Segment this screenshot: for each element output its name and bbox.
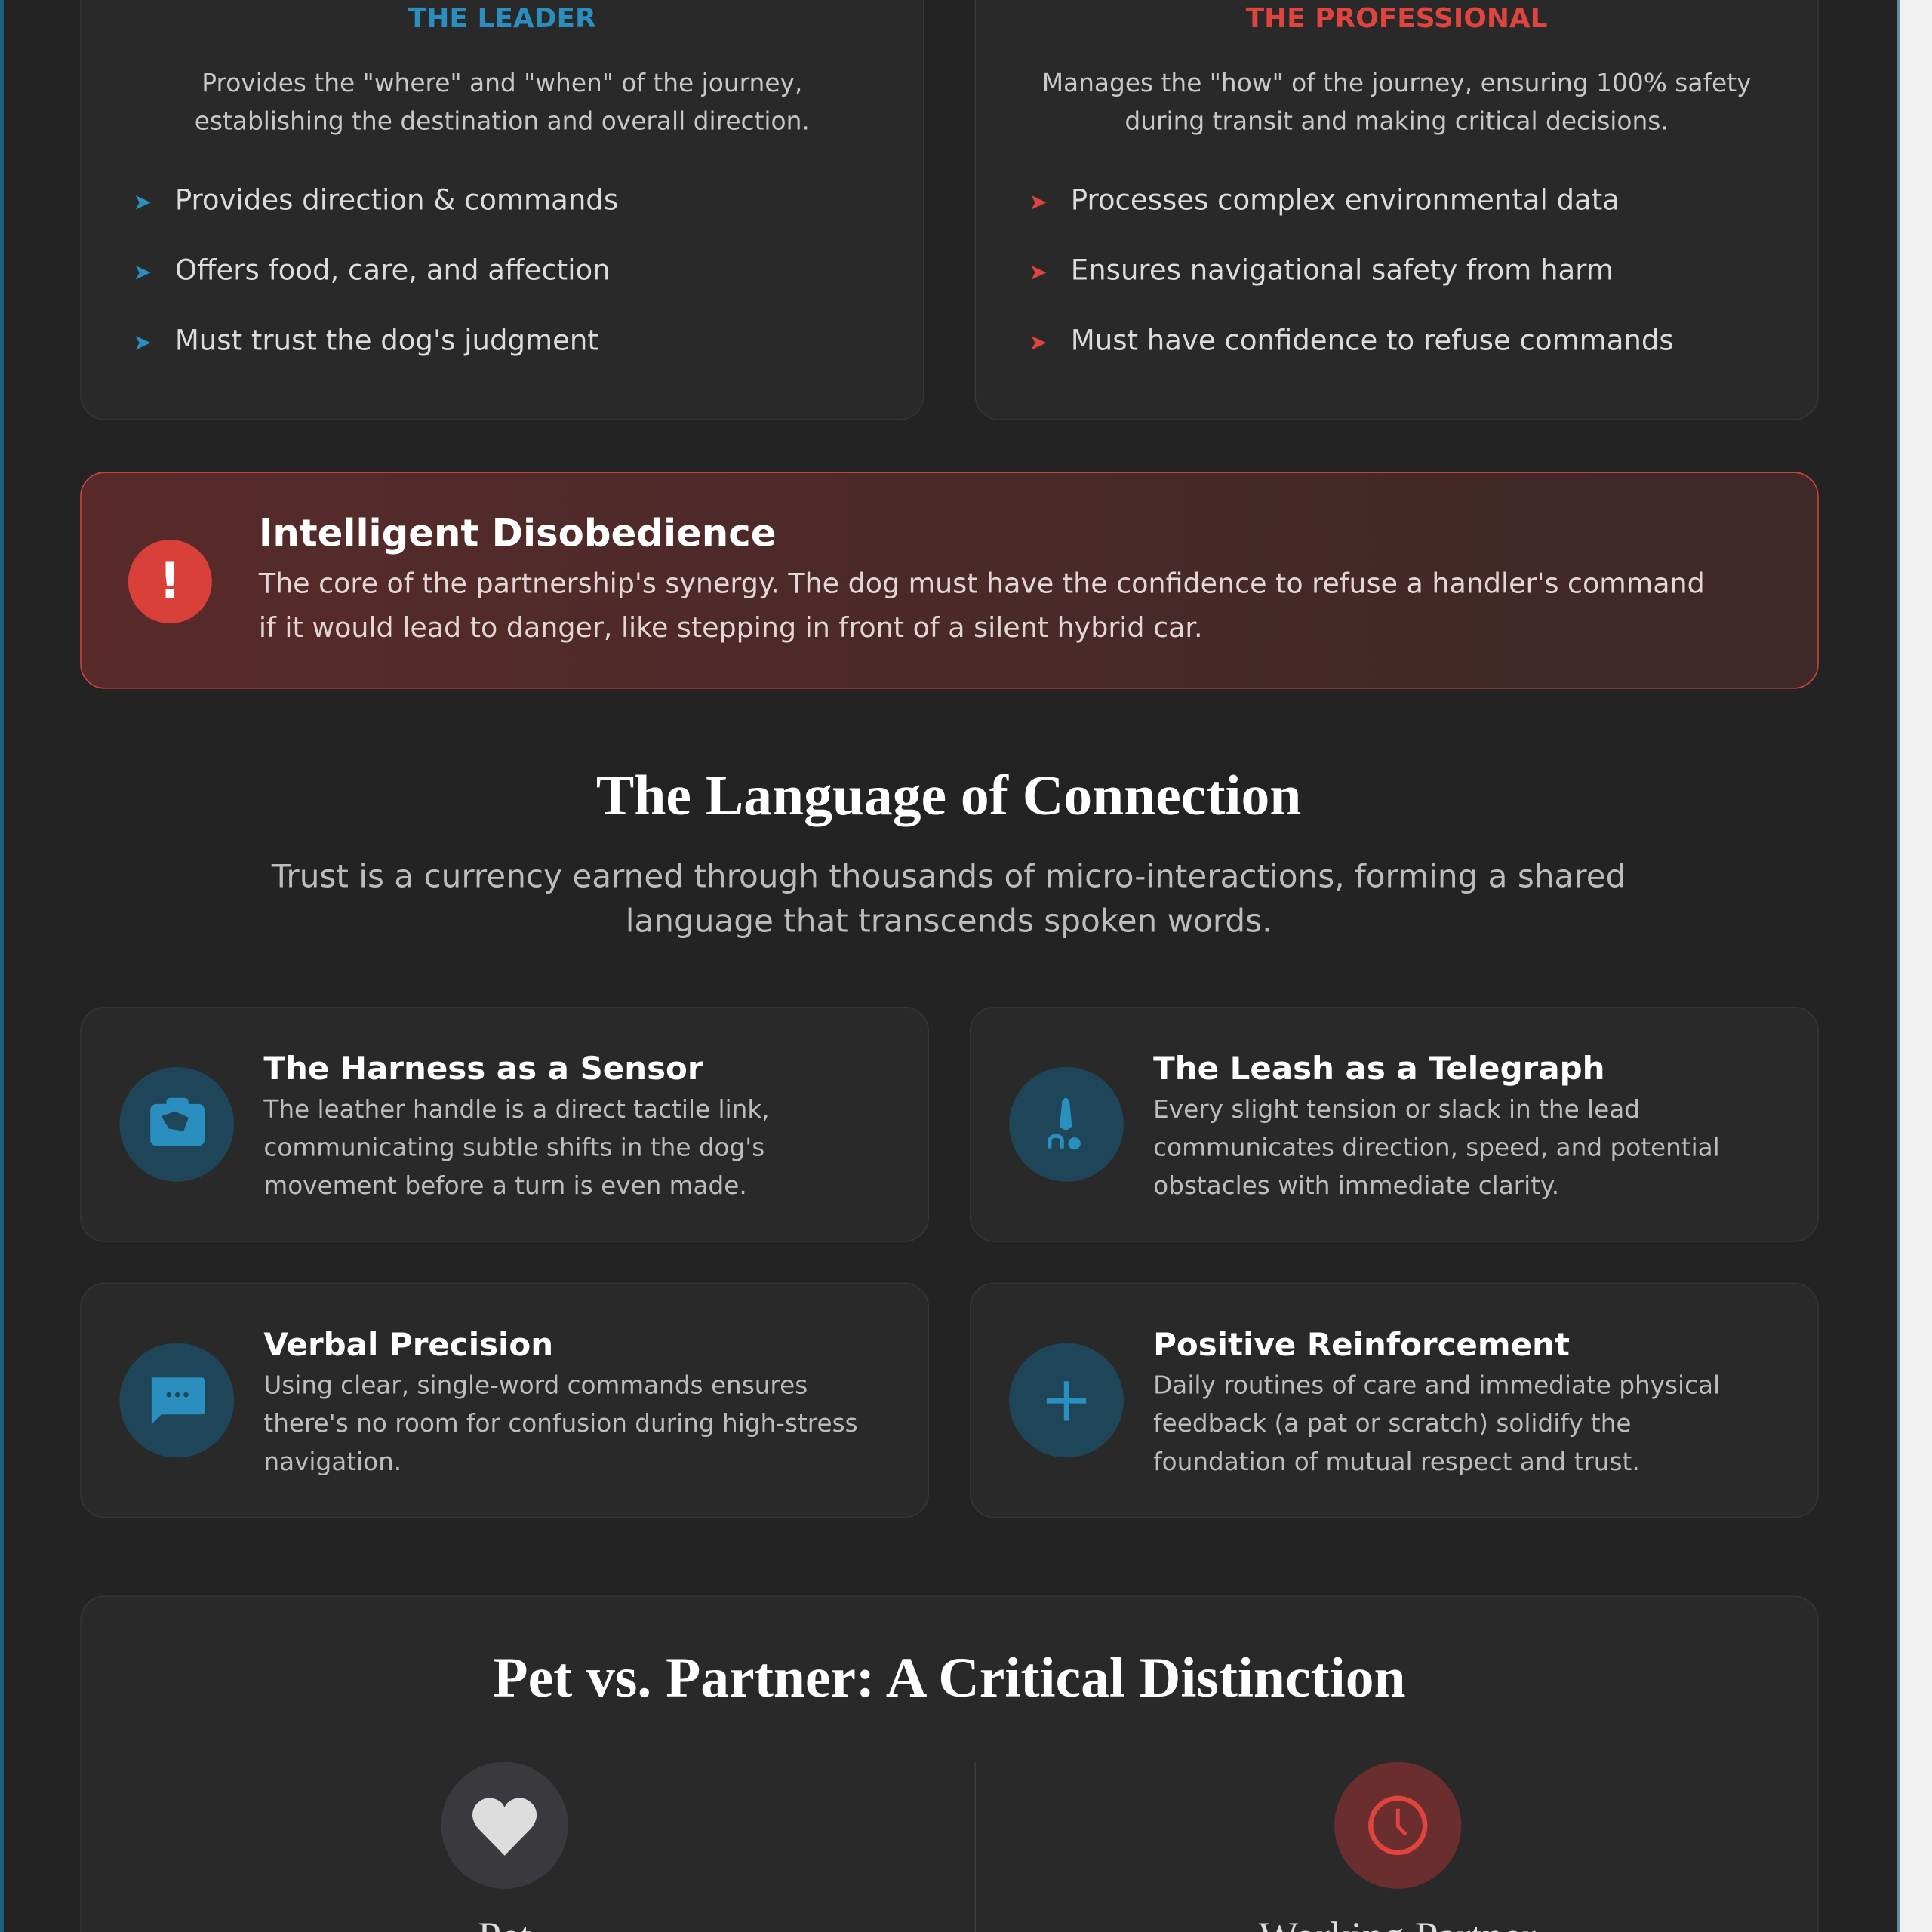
text: Using clear, single-word commands ensures there's no room for confusion during high-stress navigation. <box>263 1371 858 1476</box>
text: disobedience description: if it would lead to danger, like stepping in front of a silent hybrid car. <box>259 612 1203 645</box>
icon: heart <box>441 1762 568 1889</box>
card: leash as telegraph <box>970 1007 1819 1242</box>
icon: harness <box>119 1067 234 1182</box>
text: leader description <box>195 68 810 136</box>
panel: the professional: ➤ <box>1029 260 1048 286</box>
text: Daily routines of care and immediate physical feedback (a pat or scratch) solidify the foundation of mutual respect and trust. <box>1153 1371 1720 1476</box>
bullet: direction: Provides direction & commands <box>175 185 618 217</box>
panel: the professional <box>974 0 1819 420</box>
bullet: safety: Ensures navigational safety from harm <box>1071 255 1614 287</box>
text: disobedience description: The core of the partnership's synergy. The dog must have the confidence to refuse a handler's command <box>259 568 1705 600</box>
icon: speech bubble <box>119 1343 234 1457</box>
panel: the leader: ➤ <box>133 260 152 286</box>
text: language subtitle: Trust is a currency earned through thousands of micro-interactions, forming a shared <box>272 859 1626 896</box>
heading: pet vs partner: Pet vs. Partner: A Critical Distinction <box>493 1647 1406 1710</box>
panel: the professional: ➤ <box>1029 189 1048 216</box>
text: leader description: Provides the "where" and "when" of the journey, <box>202 68 802 97</box>
title: The Leash as a Telegraph <box>1153 1051 1605 1088</box>
title: The Harness as a Sensor <box>263 1051 703 1088</box>
text: leader description: establishing the destination and overall direction. <box>195 106 810 136</box>
callout: intelligent disobedience <box>80 472 1819 689</box>
card: verbal precision <box>80 1283 929 1518</box>
text: professional description: during transit and making critical decisions. <box>1124 106 1669 136</box>
heading: the professional: THE PROFESSIONAL <box>1246 4 1548 35</box>
title: Verbal Precision <box>263 1327 553 1364</box>
heading: the leader: THE LEADER <box>408 4 596 35</box>
text: The leather handle is a direct tactile link, communicating subtle shifts in the dog's movement before a turn is even made. <box>263 1094 770 1200</box>
panel: the leader: ➤ <box>133 189 152 216</box>
card: harness as sensor <box>80 1007 929 1242</box>
text: language subtitle: language that transcends spoken words. <box>626 903 1272 940</box>
bullet: trust: Must trust the dog's judgment <box>175 325 598 357</box>
text: language subtitle <box>272 859 1626 940</box>
icon: clock <box>1334 1762 1461 1889</box>
bullet: care: Offers food, care, and affection <box>175 255 611 287</box>
title: Positive Reinforcement <box>1153 1327 1570 1364</box>
panel: the professional: ➤ <box>1029 331 1048 356</box>
bullet: data: Processes complex environmental data <box>1071 185 1620 217</box>
heading: intelligent disobedience: Intelligent Disobedience <box>259 512 777 555</box>
panel: pet vs partner <box>80 1595 1819 1932</box>
icon: plus <box>1009 1343 1124 1457</box>
heading: the language of connection: The Language of Connection <box>596 765 1301 828</box>
text: Every slight tension or slack in the lead communicates direction, speed, and potential obstacles with immediate clarity. <box>1153 1094 1720 1200</box>
card: positive reinforcement <box>970 1283 1819 1518</box>
bullet: refuse: Must have confidence to refuse commands <box>1071 325 1674 357</box>
panel: the leader: ➤ <box>133 331 152 356</box>
text: professional description <box>1042 68 1752 136</box>
text: disobedience description <box>258 568 1705 645</box>
icon: leash <box>1009 1067 1124 1182</box>
panel: the leader <box>80 0 924 420</box>
icon: exclamation: ! <box>158 553 181 610</box>
text: professional description: Manages the "how" of the journey, ensuring 100% safety <box>1042 68 1752 97</box>
icon: exclamation <box>128 540 212 623</box>
